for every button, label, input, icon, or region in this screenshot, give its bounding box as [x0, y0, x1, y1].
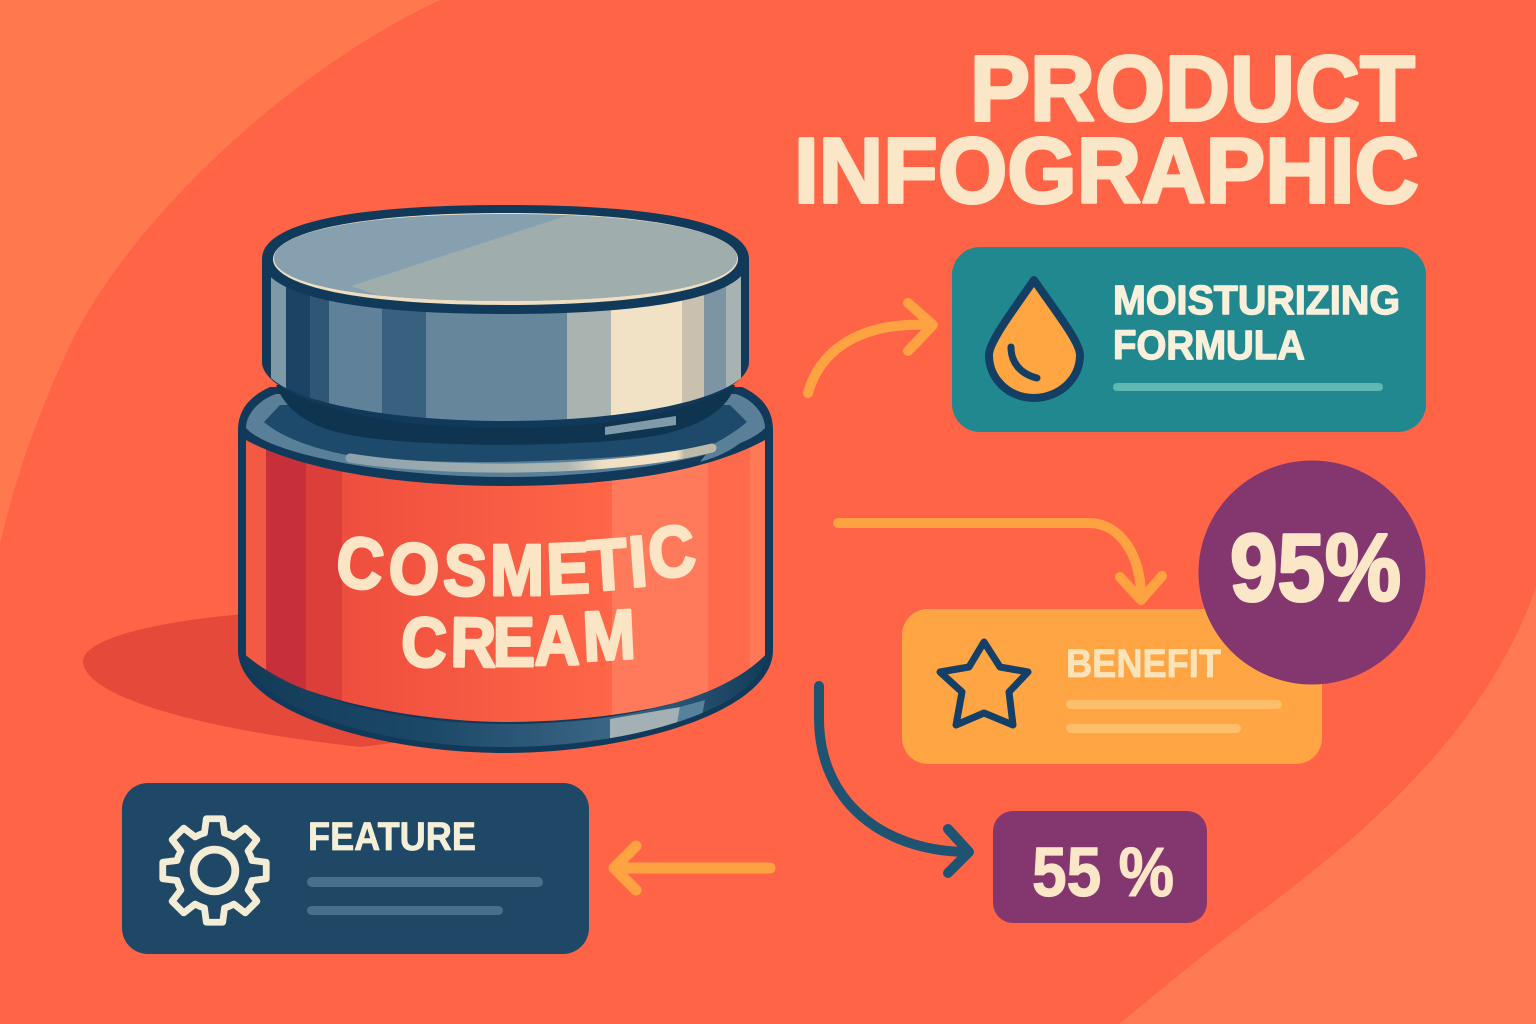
jar rim [246, 394, 765, 477]
icon: gear [163, 819, 266, 922]
under-cap highlight [605, 416, 676, 435]
panel: moisturizing formula [952, 247, 1426, 432]
cosmetic cream jar [238, 205, 773, 760]
text placeholder bars [1066, 700, 1282, 733]
jar base [246, 655, 765, 747]
arrow: to benefit [838, 523, 1162, 600]
jar body outline [238, 387, 773, 753]
icon: water drop [989, 280, 1080, 398]
panel: benefit [902, 609, 1322, 764]
heading: FORMULA [1113, 322, 1305, 368]
badge: 95%: 95% [1230, 514, 1401, 622]
badge: 95% [1198, 460, 1426, 684]
arrow: to 55% [819, 686, 969, 873]
text placeholder bars [307, 877, 543, 915]
title: PRODUCT [970, 36, 1415, 140]
cap lid [262, 205, 749, 314]
title [794, 36, 1419, 222]
heading: FEATURE [308, 815, 476, 859]
badge: 55%: 55 % [1032, 833, 1174, 911]
cap stripes [271, 276, 741, 421]
arrow: jar to moisturizing formula [808, 303, 933, 393]
jar label text: COSMETIC [332, 508, 700, 612]
title: INFOGRAPHIC [794, 118, 1419, 222]
badge: 55% [993, 811, 1207, 923]
icon: star [940, 642, 1028, 725]
jar label [246, 430, 765, 730]
heading [1113, 277, 1400, 368]
panel: feature [122, 783, 589, 954]
jar label text [332, 508, 700, 683]
text placeholder bar [1113, 383, 1383, 391]
jar label text: CREAM [400, 596, 637, 683]
cap side [262, 258, 749, 428]
jar shadow [83, 614, 500, 747]
under-cap shadow [276, 385, 735, 445]
arrow: to feature [614, 846, 770, 890]
heading: MOISTURIZING [1113, 277, 1400, 323]
heading: BENEFIT [1066, 642, 1221, 686]
